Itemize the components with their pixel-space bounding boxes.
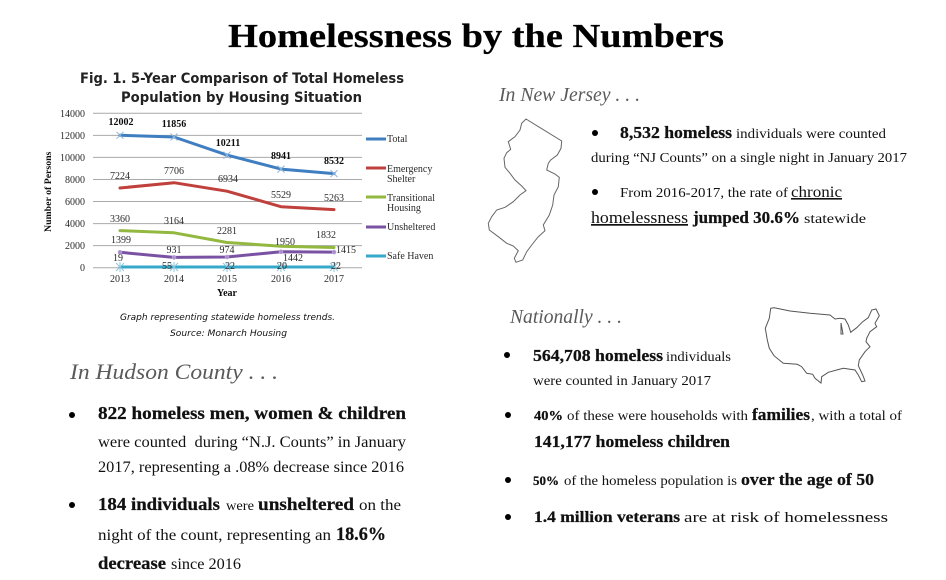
y axis tick labels: 0 (80, 263, 85, 274)
y axis tick labels: 4000 (65, 219, 85, 230)
bullet: 8,532 homeless (591, 123, 907, 166)
bullet: 50% over age 50: over the age of 50 (741, 470, 874, 489)
other data labels: 1950 (275, 237, 295, 248)
bullet: 184 individuals: night of the count, representing an (98, 527, 331, 544)
bullet: 184 individuals: unsheltered (258, 494, 354, 514)
other data labels: 5529 (271, 190, 291, 201)
total data labels: 12002 (108, 117, 134, 128)
series lines (120, 135, 334, 267)
bullet: 564,708 homeless: individuals (666, 350, 731, 365)
bullet: chronic homelessness: jumped 30.6% (692, 208, 800, 227)
bullet: 184 individuals: 184 individuals (98, 494, 220, 514)
axis titles: Year (217, 288, 238, 299)
y axis tick labels: 2000 (65, 241, 85, 252)
bullet: 564,708 homeless: were counted in January 2017 (533, 374, 711, 389)
total data labels: 11856 (162, 119, 186, 130)
panel: line chart figure (43, 71, 435, 339)
heading: In Hudson County: In Hudson County . . . (69, 359, 278, 384)
bullet: 8,532 homeless: individuals were counted (736, 127, 886, 142)
other data labels: 1415 (336, 245, 356, 256)
total data labels: 8532 (324, 156, 344, 167)
other data labels: 2281 (217, 226, 237, 237)
bullet: 184 individuals: since 2016 (171, 556, 241, 573)
other data labels: 6934 (218, 174, 238, 185)
axis titles: Number of Persons (43, 151, 54, 232)
bullet: 184 individuals (69, 494, 401, 573)
other data labels: 7224 (110, 171, 130, 182)
bullet: 40% families (505, 405, 902, 451)
bullet: 40% families: 40% (534, 409, 563, 424)
legend: Safe Haven (387, 251, 433, 262)
x axis tick labels: 2015 (217, 274, 237, 285)
chart title: Fig. 1. 5-Year Comparison of Total Homeless (80, 71, 404, 87)
chart title: Population by Housing Situation (121, 90, 362, 106)
title: Homelessness by the Numbers (228, 18, 724, 55)
bullet: 1.4 million veterans (505, 509, 888, 526)
bullet: 184 individuals: on the (359, 497, 401, 514)
bullet: 40% families: of these were households with (567, 409, 748, 424)
other data labels (110, 166, 356, 272)
x axis tick labels (110, 274, 344, 285)
panel: Nationally (504, 306, 902, 526)
heading: In New Jersey: In New Jersey . . . (498, 84, 640, 106)
bullet: 50% over age 50 (505, 470, 874, 489)
bullet: 822 homeless: 822 homeless men, women & children (98, 403, 406, 423)
x axis tick labels: 2017 (324, 274, 344, 285)
bullet: 40% families: families (752, 405, 810, 424)
other data labels: 20 (277, 261, 287, 272)
legend: Unsheltered (387, 222, 435, 233)
other data labels: 19 (113, 253, 123, 264)
total data labels: 10211 (216, 138, 240, 149)
heading: Nationally: Nationally . . . (509, 306, 622, 328)
y axis tick labels (60, 109, 85, 274)
y axis tick labels: 8000 (65, 175, 85, 186)
other data labels: 931 (166, 245, 182, 256)
chart title (80, 71, 404, 106)
panel: In New Jersey (488, 84, 907, 262)
panel: In Hudson County (69, 359, 406, 573)
other data labels: 1442 (283, 253, 303, 264)
bullet: 184 individuals: 18.6% (336, 524, 386, 545)
other data labels: 5263 (324, 193, 344, 204)
other data labels: 3164 (164, 216, 184, 227)
bullet: chronic homelessness: chronic (791, 184, 842, 201)
other data labels: 22 (331, 261, 341, 272)
bullet: 822 homeless: were counted during “N.J. Counts” in January (98, 434, 406, 451)
y axis tick labels: 6000 (65, 197, 85, 208)
bullet: 184 individuals: were (226, 499, 254, 514)
legend (366, 134, 435, 262)
y axis tick labels: 12000 (60, 131, 85, 142)
y axis tick labels: 10000 (60, 153, 85, 164)
bullet: 822 homeless (69, 403, 406, 476)
icon detail: Lake Michigan (841, 323, 843, 334)
other data labels: 22 (225, 261, 235, 272)
bullet: chronic homelessness: statewide (804, 212, 866, 227)
bullet: 8,532 homeless: during “NJ Counts” on a single night in January 2017 (591, 151, 907, 166)
bullet: 822 homeless: 2017, representing a .08% decrease since 2016 (98, 459, 404, 476)
legend: Emergency (387, 164, 432, 175)
bullet: chronic homelessness: From 2016-2017, the rate of (620, 186, 788, 201)
bullet: 8,532 homeless: 8,532 homeless (620, 123, 732, 142)
legend: Shelter (387, 174, 416, 185)
bullet: chronic homelessness (591, 184, 866, 227)
chart caption: Source: Monarch Housing (170, 329, 287, 339)
bullet: 1.4 million veterans: 1.4 million veterans (534, 509, 680, 526)
bullet: 1.4 million veterans: are at risk of homelessness (684, 510, 888, 526)
series markers (116, 132, 338, 272)
bullet: 50% over age 50: 50% (533, 473, 559, 488)
x axis tick labels: 2013 (110, 274, 130, 285)
legend: Transitional (387, 193, 435, 204)
icon: United States outline (765, 308, 879, 383)
y axis tick labels: 14000 (60, 109, 85, 120)
bullet: 40% families: 141,177 homeless children (534, 432, 731, 451)
bullet: 564,708 homeless (504, 346, 731, 389)
bullet: 40% families: , with a total of (811, 409, 902, 424)
x axis tick labels: 2014 (164, 274, 184, 285)
bullet: 50% over age 50: of the homeless population is (564, 474, 737, 489)
chart gridlines and axes (93, 113, 362, 268)
bullet: 564,708 homeless: 564,708 homeless (533, 346, 663, 365)
other data labels: 7706 (164, 166, 184, 177)
icon: New Jersey outline (488, 119, 562, 262)
total data labels (108, 117, 344, 167)
total data labels: 8941 (271, 151, 291, 162)
x axis tick labels: 2016 (271, 274, 291, 285)
axis titles (43, 151, 238, 299)
chart caption: Graph representing statewide homeless trends. (120, 313, 335, 323)
bullet: chronic homelessness: homelessness (591, 208, 688, 227)
other data labels: 55 (162, 261, 172, 272)
bullet: 184 individuals: decrease (98, 553, 166, 573)
other data labels: 1832 (316, 230, 336, 241)
other data labels: 3360 (110, 214, 130, 225)
other data labels: 974 (220, 245, 234, 256)
chart caption (120, 313, 335, 339)
legend: Housing (387, 203, 421, 214)
legend: Total (387, 134, 408, 145)
other data labels: 1399 (111, 235, 131, 246)
